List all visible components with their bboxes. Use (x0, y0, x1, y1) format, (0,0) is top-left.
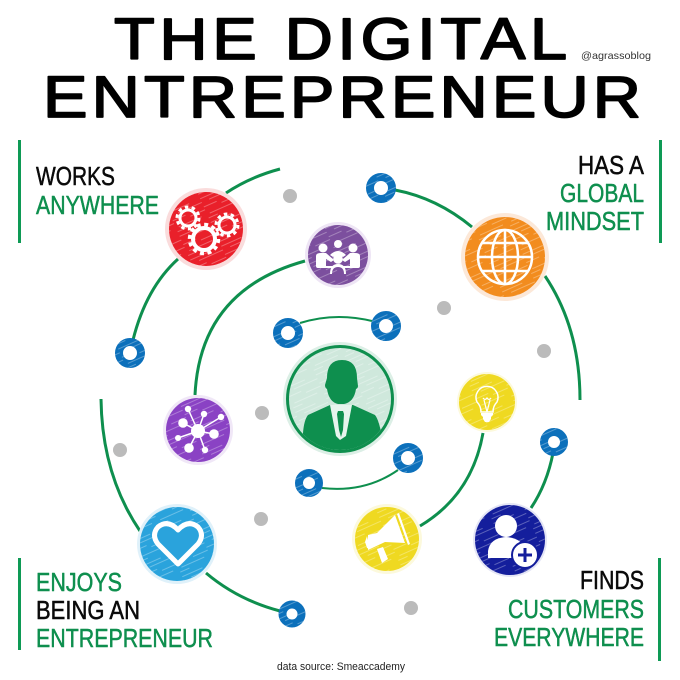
gray dots (113, 189, 551, 615)
attribution handle: @agrassoblog (581, 50, 651, 62)
data source footer: data source: Smeaccademy (277, 661, 405, 673)
panel: has a global mindset: GLOBAL (560, 180, 644, 208)
panel: finds customers everywhere: CUSTOMERS (508, 596, 644, 624)
panel: has a global mindset: HAS A (578, 152, 644, 180)
icon: navy add user (473, 503, 547, 577)
title (43, 7, 641, 130)
panel: works anywhere: ANYWHERE (36, 192, 159, 220)
panel: has a global mindset (546, 140, 662, 243)
icon: central entrepreneur silhouette (283, 342, 397, 456)
icon: purple meeting (305, 222, 371, 288)
title: ENTREPRENEUR (43, 65, 641, 130)
connecting arcs (101, 169, 580, 611)
blue ring nodes (119, 177, 564, 624)
icon: orange globe (461, 213, 549, 301)
panel: works anywhere: WORKS (36, 163, 115, 191)
panel: works anywhere (18, 140, 159, 243)
icon: blue heart (137, 504, 217, 584)
panel: finds customers everywhere (494, 558, 661, 661)
panel: enjoys being an entrepreneur: BEING AN (36, 597, 140, 625)
title: THE DIGITAL (114, 7, 567, 72)
panel: enjoys being an entrepreneur: ENTREPRENEUR (36, 625, 213, 653)
icon: yellow light bulb (457, 372, 517, 432)
panel: has a global mindset: MINDSET (546, 208, 644, 236)
icon: yellow megaphone (352, 504, 422, 574)
panel: finds customers everywhere: FINDS (580, 567, 644, 595)
icon: purple network hub (163, 395, 233, 465)
panel: enjoys being an entrepreneur: ENJOYS (36, 569, 122, 597)
panel: finds customers everywhere: EVERYWHERE (494, 624, 644, 652)
icon: red gears (165, 188, 247, 270)
panel: enjoys being an entrepreneur (18, 558, 213, 653)
